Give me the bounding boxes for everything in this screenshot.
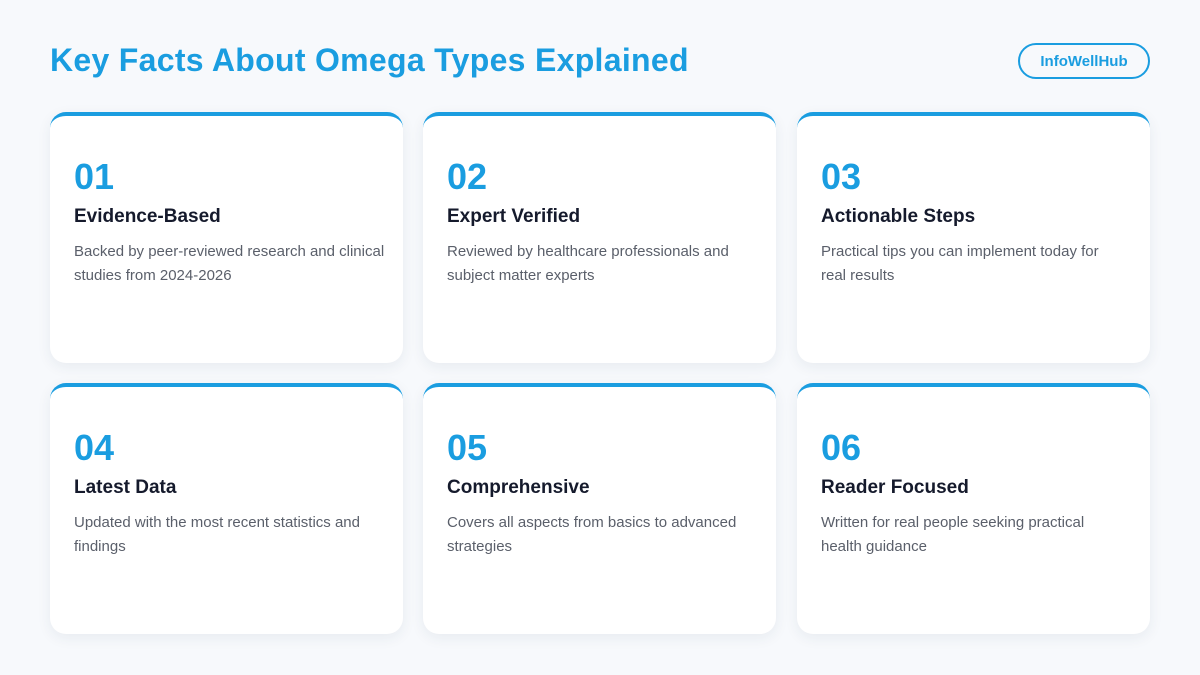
card 01: 01 [74,156,114,197]
card 03: Practical tips you can implement today for [821,243,1099,260]
card 05: 05 [447,427,487,468]
card 01: Evidence-Based [74,206,221,227]
card 03: Actionable Steps [821,206,975,227]
card 05: Covers all aspects from basics to advanced [447,514,736,531]
card 06 [797,383,1150,634]
card 04: Latest Data [74,477,176,498]
card 04: Updated with the most recent statistics and [74,514,360,531]
card 06: Reader Focused [821,477,969,498]
card 01: Backed by peer-reviewed research and clinical [74,243,384,260]
card 04: findings [74,538,126,555]
card 03 [797,112,1150,363]
card 03: real results [821,267,894,284]
badge: brand [1018,43,1150,79]
card 01 [50,112,403,363]
card 04 [50,383,403,634]
card 02 [423,112,776,363]
card 05 [423,383,776,634]
card 05: Comprehensive [447,477,590,498]
card 02: Expert Verified [447,206,580,227]
card 06: 06 [821,427,861,468]
card 02: subject matter experts [447,267,595,284]
card 05: strategies [447,538,512,555]
card 06: health guidance [821,538,927,555]
card 04: 04 [74,427,114,468]
card 02: 02 [447,156,487,197]
card 03: 03 [821,156,861,197]
card 06: Written for real people seeking practical [821,514,1084,531]
badge: brand: InfoWellHub [1040,53,1128,70]
title: Key Facts About Omega Types Explained [50,42,689,78]
card 01: studies from 2024-2026 [74,267,232,284]
card 02: Reviewed by healthcare professionals and [447,243,729,260]
